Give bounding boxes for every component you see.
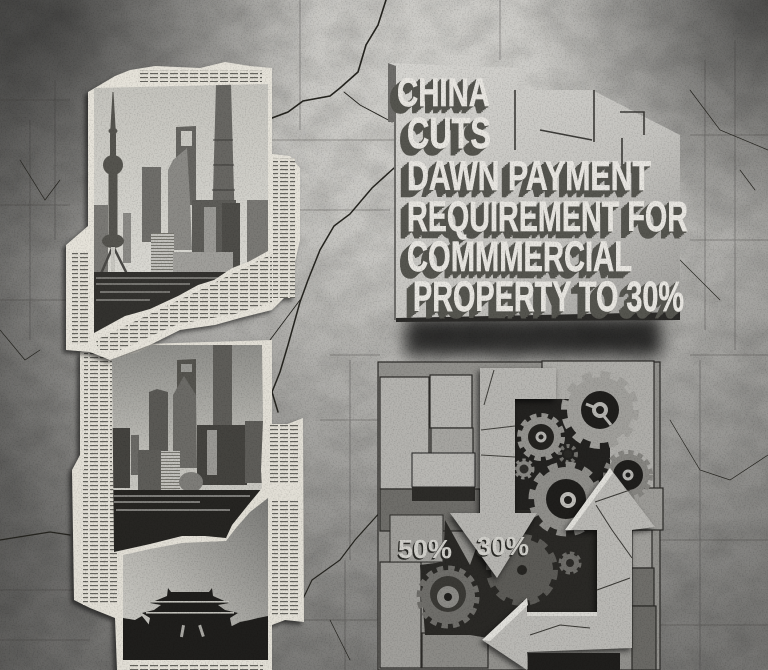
temple silhouette bbox=[123, 588, 268, 661]
photo: Pudong skyline, top bbox=[94, 84, 268, 337]
Oriental Pearl Tower bbox=[100, 92, 128, 276]
headline line: Cuts: CUTS bbox=[407, 109, 491, 158]
torn newspaper: lower clipping bbox=[72, 340, 304, 670]
gear: center bbox=[534, 467, 598, 531]
gear: lower dark bbox=[491, 539, 553, 601]
stone gear panel bbox=[378, 361, 663, 670]
headline line: China: CHINA bbox=[397, 71, 490, 115]
stone blocks bbox=[378, 361, 663, 670]
headline line: Dawn Payment: DAWN PAYMENT bbox=[407, 152, 651, 199]
gear: bottom left bbox=[421, 570, 475, 624]
newspaper collage bbox=[66, 62, 304, 670]
down arrow bbox=[450, 368, 556, 578]
50% plate bbox=[390, 515, 443, 562]
Shanghai Tower bbox=[212, 84, 234, 200]
gear: small lower bbox=[561, 554, 579, 572]
photo: temple silhouette bbox=[123, 498, 269, 662]
recess below left arrow bbox=[528, 653, 620, 670]
gear: top right bbox=[567, 377, 633, 443]
photo: Pudong skyline, middle bbox=[112, 345, 263, 552]
bottle-opener tower bbox=[176, 126, 196, 205]
label: 50%: 50% bbox=[398, 534, 452, 564]
headline line: Commmercial: COMMMERCIAL bbox=[407, 233, 632, 281]
slab shadow bbox=[405, 316, 661, 356]
headline slab bbox=[388, 63, 688, 356]
gear: right bbox=[607, 454, 649, 496]
headline text bbox=[397, 71, 688, 321]
raised stone block bbox=[412, 453, 475, 501]
slab block bbox=[388, 63, 680, 320]
gear: small left bbox=[516, 461, 532, 477]
torn newspaper: upper clipping bbox=[66, 62, 300, 360]
label: 30%: 30% bbox=[477, 531, 529, 561]
gear: upper middle bbox=[521, 417, 561, 457]
bent up and left arrow bbox=[482, 468, 655, 670]
dark recess behind gears bbox=[420, 399, 610, 640]
gear: tiny bbox=[560, 446, 576, 462]
